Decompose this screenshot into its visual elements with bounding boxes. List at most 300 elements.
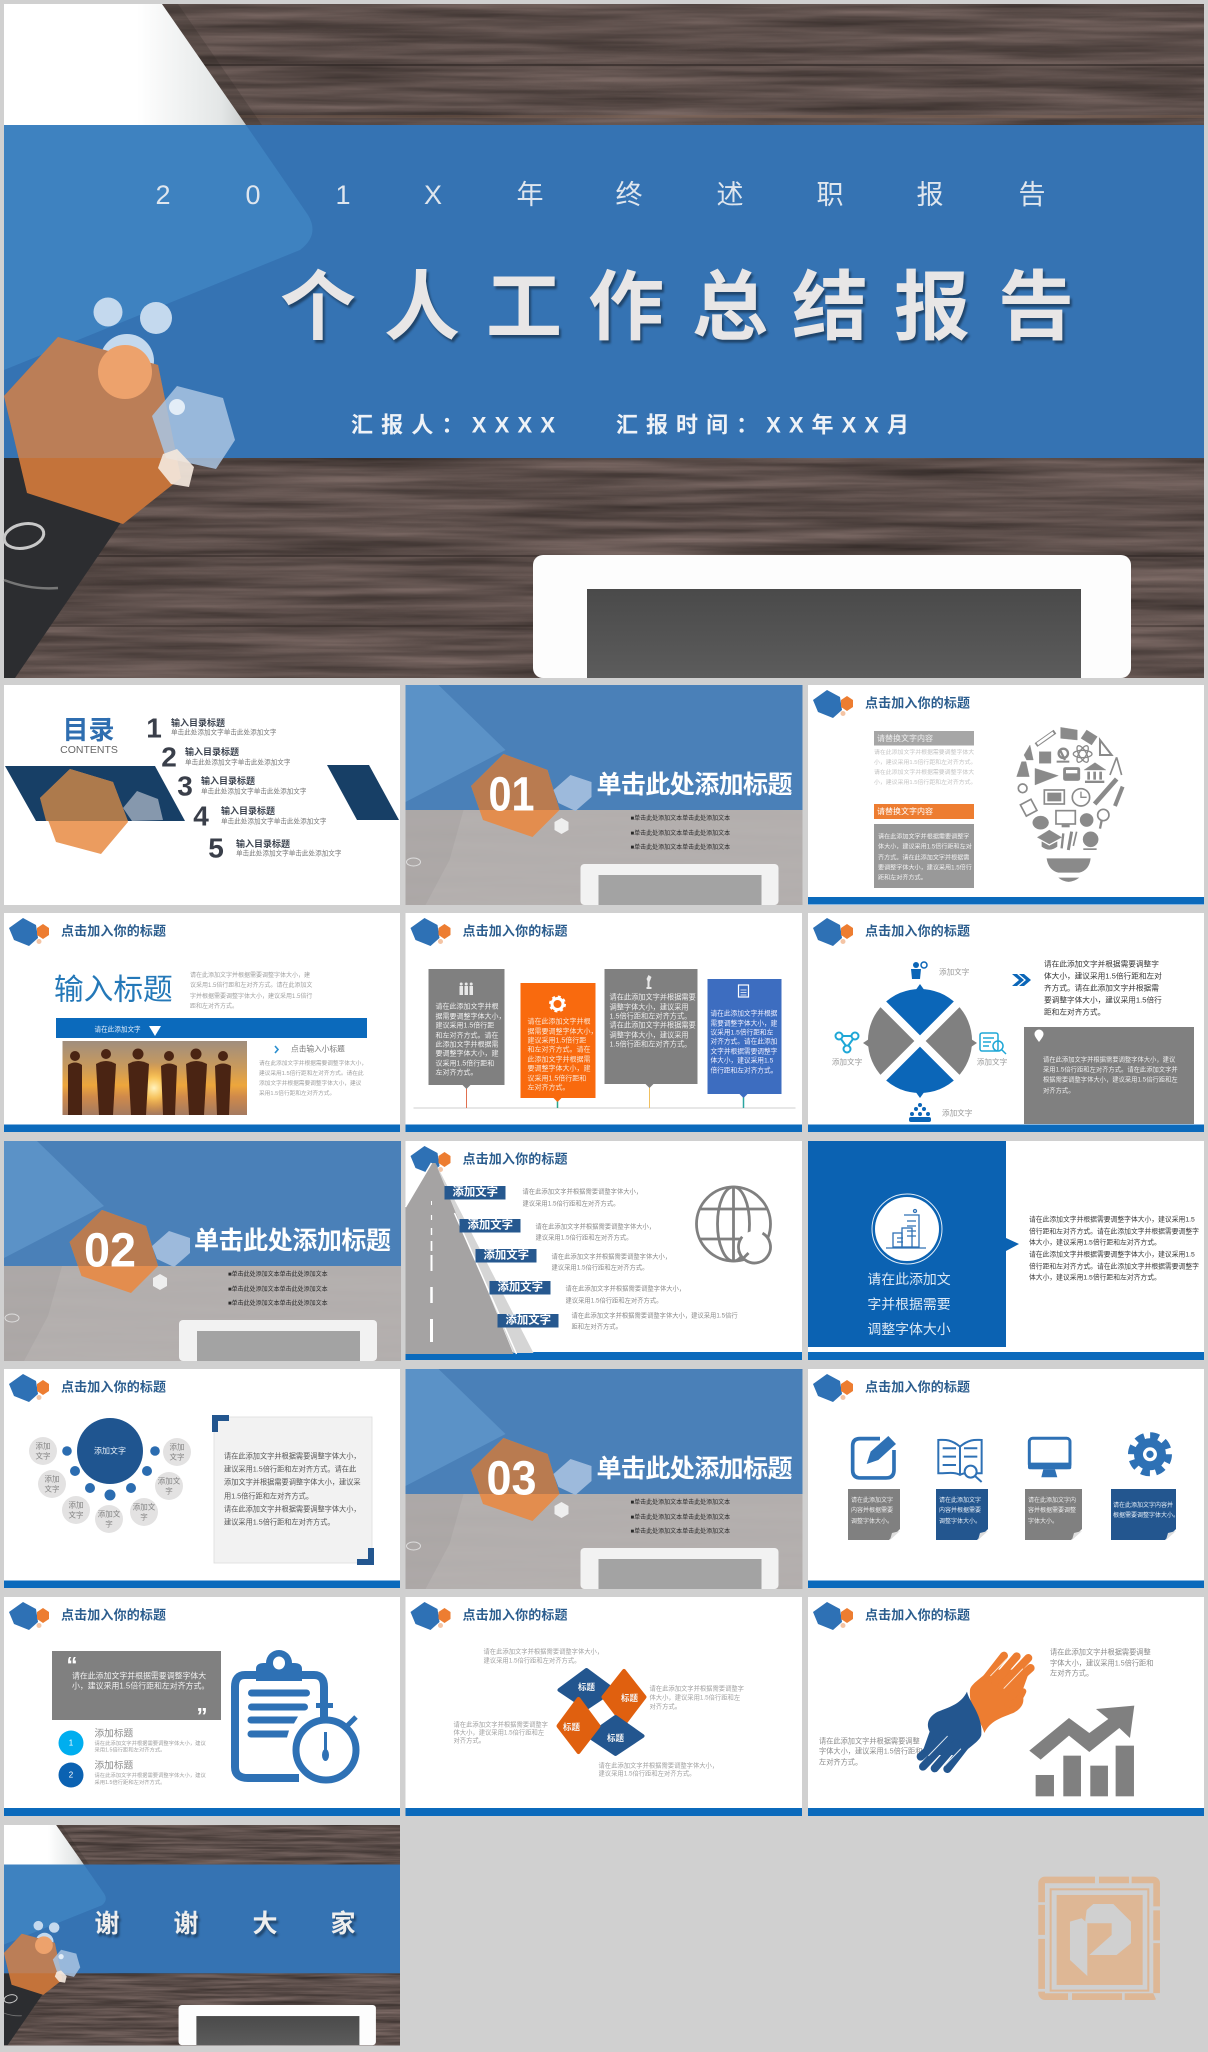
- outer circle labels: 添加文: [133, 1502, 156, 1512]
- contents list: 输入目录标题: [236, 838, 290, 849]
- item 2: [58, 1760, 206, 1788]
- cover title: 人: [384, 266, 460, 350]
- slide background: [808, 1141, 1204, 1360]
- contents list: 单击此处添加文字单击此处添加文字: [236, 848, 342, 858]
- slide background: [4, 685, 400, 905]
- header logo: [9, 918, 49, 946]
- thank you text: 家: [330, 1910, 356, 1938]
- section bullets: ■单击此处添加文本单击此处添加文本: [630, 1527, 730, 1535]
- road descriptions: 建议采用1.5倍行距和左对齐方式。: [536, 1232, 632, 1242]
- cover subtitle: 年: [516, 180, 544, 210]
- cover subtitle: 终: [616, 180, 642, 210]
- side paragraph: 采用1.5倍行距和左对齐方式。: [259, 1089, 335, 1097]
- section background: [4, 1141, 401, 1361]
- slide: cover: [2, 4, 1204, 678]
- slide title: 点击加入你的标题: [462, 924, 568, 938]
- card 4: 请在此添加文字并根据: [710, 1008, 778, 1018]
- section number: 03: [486, 1452, 536, 1506]
- left text: 体大小，建议采用1.5倍行距和左: [454, 1728, 544, 1736]
- orange hexagon: [40, 769, 128, 854]
- big heading: 输入标题: [54, 974, 173, 1006]
- left text: 左对齐方式。: [819, 1758, 862, 1766]
- slide title: 点击加入你的标题: [61, 1380, 166, 1394]
- grey heading bar: [874, 731, 974, 746]
- intro paragraph: 字并根据需要调整字体大小，建议采用1.5倍行: [190, 992, 312, 1000]
- card 3: 请在此添加文字并根据需要: [610, 1020, 696, 1030]
- cover title: 工: [486, 266, 562, 350]
- blue ribbon: 请在此添加文字: [94, 1024, 141, 1034]
- thank you text: 大: [252, 1910, 278, 1938]
- side paragraph: 请在此添加文字并根据需要调整字体大小，: [259, 1059, 367, 1067]
- slide: input title with photo: [4, 913, 400, 1132]
- icon: rising bar chart: [1029, 1706, 1134, 1796]
- paragraph: 倍行距和左对齐方式。请在此添加文字并根据需要调整字: [1029, 1262, 1199, 1270]
- four sector circle: [863, 984, 977, 1098]
- contents list: 5: [208, 832, 224, 864]
- outer circle labels: 字: [165, 1486, 173, 1496]
- section title: 单击此处添加标题: [596, 1455, 792, 1483]
- grey info box: [1024, 1027, 1194, 1124]
- card 2: 建议采用1.5倍行距: [528, 1036, 586, 1044]
- reporter and date: 汇报人：XXXX: [351, 412, 555, 438]
- card 1: 要调整字体大小，建: [436, 1048, 498, 1058]
- grey info box: 对齐方式。: [1043, 1086, 1074, 1094]
- card 3: [1025, 1489, 1082, 1540]
- outer circle labels: 添加: [68, 1500, 84, 1510]
- cover subtitle: X: [424, 180, 442, 210]
- icon: document search: [980, 1033, 1006, 1054]
- icon: people group: [909, 1103, 931, 1122]
- card 4: 议采用1.5倍行距和左: [710, 1028, 774, 1036]
- quote box: “: [66, 1652, 78, 1678]
- grey paragraph box: 齐方式。请在此添加文字并根据需: [878, 854, 969, 862]
- card 1: [848, 1489, 900, 1540]
- header logo: [813, 690, 853, 718]
- slide: circular diagram: [808, 913, 1204, 1132]
- right paragraph: 齐方式。请在此添加文字并根据需: [1044, 982, 1159, 992]
- outer circle labels: 文字: [36, 1450, 50, 1460]
- faded paragraph: 请在此添加文字并根据需要调整字体大: [874, 768, 974, 776]
- card 1: 此添加文字并根据需: [436, 1040, 498, 1048]
- footer bar: [808, 1124, 1204, 1132]
- icon: clipboard with stopwatch: [235, 1650, 356, 1780]
- footer bar: [4, 1580, 400, 1588]
- slide background: [406, 913, 802, 1132]
- slide title: 点击加入你的标题: [865, 696, 970, 710]
- slide title: 点击加入你的标题: [462, 1152, 568, 1166]
- road descriptions: 建议采用1.5倍行距和左对齐方式。: [566, 1296, 662, 1304]
- paragraph: 请在此添加文字并根据需要调整字体大小，建议采用1.5: [1029, 1250, 1195, 1258]
- watermark stamp: [1042, 1880, 1157, 1997]
- road labels: 添加文字: [498, 1280, 543, 1294]
- card 3: 1.5倍行距和左对齐方式。: [610, 1012, 691, 1020]
- header logo: [9, 1374, 49, 1402]
- slide: satellite circles: [4, 1369, 400, 1588]
- footer bar: [808, 1808, 1204, 1816]
- cover subtitle: 述: [716, 180, 744, 210]
- section bullets: ■单击此处添加文本单击此处添加文本: [630, 814, 730, 822]
- orange heading bar: [874, 804, 974, 819]
- card 4: 请在此添加文字内容并: [1113, 1501, 1173, 1509]
- left text: [454, 1720, 548, 1744]
- quote box: [52, 1651, 221, 1728]
- card 2: 要调整字体大小，建: [528, 1064, 590, 1072]
- text panel: [212, 1415, 374, 1565]
- side paragraph: 添加文字并根据需要调整字体大小，建议: [259, 1079, 362, 1087]
- grey paragraph box: [874, 824, 974, 888]
- diamond cluster: 标题: [621, 1693, 638, 1703]
- slide title: 点击加入你的标题: [865, 1380, 970, 1394]
- road descriptions: 请在此添加文字并根据需要调整字体大小，: [552, 1252, 671, 1260]
- cover title: 结: [792, 266, 868, 350]
- section bullets: [630, 814, 730, 851]
- card 2: 调整字体大小。: [939, 1517, 981, 1525]
- header logo: [813, 1374, 853, 1402]
- outer circle labels: 文字: [44, 1484, 60, 1494]
- cover title: [280, 266, 1074, 350]
- card 4: 文字并根据需要调整字: [710, 1046, 778, 1056]
- double chevron arrow: [1012, 974, 1031, 986]
- contents list: 单击此处添加文字单击此处添加文字: [201, 786, 307, 796]
- footer bar: [406, 1124, 802, 1132]
- section bullets: ■单击此处添加文本单击此处添加文本: [228, 1299, 328, 1307]
- slide background: [406, 1597, 802, 1816]
- grey info box: 请在此添加文字并根据需要调整字体大小，建议: [1043, 1054, 1176, 1064]
- icon: gear: [1131, 1436, 1169, 1473]
- footer bar: [4, 1124, 400, 1132]
- top right text: 字体大小，建议采用1.5倍行距和: [1050, 1658, 1153, 1668]
- blue panel: 请在此添加文: [867, 1271, 951, 1287]
- text panel: 请在此添加文字并根据需要调整字体大小，: [224, 1452, 361, 1460]
- cover subtitle: 0: [245, 180, 261, 210]
- outer circle labels: [36, 1440, 184, 1528]
- slide: contents: [4, 685, 400, 905]
- cover background with wood, banner and hexagons: [2, 4, 1204, 678]
- slide: hands and chart: [808, 1597, 1204, 1816]
- contents english label: CONTENTS: [60, 744, 118, 756]
- top text: 请在此添加文字并根据需要调整字体大小，: [484, 1646, 603, 1656]
- paragraph: 倍行距和左对齐方式。请在此添加文字并根据需要调整字: [1029, 1226, 1199, 1236]
- bottom text: 建议采用1.5倍行距和左对齐方式。: [598, 1768, 695, 1778]
- card 4: 对齐方式。请在此添加: [710, 1036, 778, 1046]
- top right text: 请在此添加文字并根据需要调整: [1050, 1648, 1151, 1656]
- intro paragraph: 议采用1.5倍行距和左对齐方式。请在此添加文: [190, 981, 312, 989]
- paragraph: 请在此添加文字并根据需要调整字体大小，建议采用1.5: [1029, 1214, 1195, 1224]
- road descriptions: 请在此添加文字并根据需要调整字体大小，: [536, 1222, 655, 1230]
- slide: blue panel with text: [808, 1141, 1204, 1360]
- card 2: 内容并根据需要: [939, 1506, 981, 1514]
- contents list: [146, 712, 342, 864]
- label top: 添加文字: [939, 966, 970, 976]
- card 2: 据需要调整字体大小，: [528, 1026, 598, 1036]
- item 2: 采用1.5倍行距和左对齐方式。: [94, 1778, 165, 1786]
- icon: edit: [853, 1436, 896, 1478]
- grey info box: 采用1.5倍行距和左对齐方式。请在此添加文字并: [1043, 1064, 1178, 1074]
- contents list: 1: [146, 712, 162, 744]
- icon: network: [836, 1032, 858, 1052]
- contents list: 输入目录标题: [221, 805, 275, 816]
- road descriptions: 请在此添加文字并根据需要调整字体大小，: [566, 1284, 685, 1292]
- road descriptions: 请在此添加文字并根据需要调整字体大小，: [522, 1186, 642, 1196]
- cover title: 作: [588, 266, 664, 350]
- blue panel: 调整字体大小: [867, 1321, 951, 1337]
- road labels: 添加文字: [484, 1248, 529, 1262]
- road labels: [444, 1184, 558, 1328]
- contents list: 单击此处添加文字单击此处添加文字: [171, 728, 277, 736]
- section bullets: ■单击此处添加文本单击此处添加文本: [630, 1513, 730, 1521]
- card 3: 请在此添加文字并根据需要: [610, 992, 696, 1002]
- header logo: [410, 918, 450, 946]
- slide title: 点击加入你的标题: [865, 924, 970, 938]
- contents list: 4: [193, 800, 209, 832]
- section bullets: ■单击此处添加文本单击此处添加文本: [228, 1285, 328, 1293]
- diamond cluster: 标题: [607, 1733, 624, 1743]
- text panel: 建议采用1.5倍行距和左对齐方式。: [224, 1518, 335, 1526]
- item 1: [58, 1728, 206, 1756]
- right paragraph: 要调整字体大小，建议采用1.5倍行: [1044, 994, 1162, 1004]
- thank you text: [94, 1910, 356, 1938]
- outer circle labels: 字: [140, 1512, 148, 1522]
- connecting dots: [62, 1446, 160, 1500]
- cover subtitle: 职: [816, 180, 844, 210]
- thank you text: 谢: [94, 1910, 120, 1938]
- icon: presenter: [911, 962, 927, 979]
- diamond cluster: 标题: [578, 1682, 595, 1692]
- grey heading bar: 请替换文字内容: [877, 733, 933, 743]
- diamond cluster: [558, 1670, 644, 1754]
- outer circle labels: 文字: [68, 1510, 84, 1520]
- slide: clipboard: [4, 1597, 400, 1816]
- contents list: 输入目录标题: [201, 775, 255, 786]
- card 4: 需要调整字体大小，建: [710, 1018, 778, 1028]
- section background: [406, 685, 802, 905]
- faded paragraph: [874, 748, 976, 786]
- right paragraph: 请在此添加文字并根据需要调整字: [1044, 958, 1159, 968]
- label bottom: 添加文字: [942, 1108, 973, 1118]
- section bullets: ■单击此处添加文本单击此处添加文本: [630, 843, 730, 851]
- footer bar: [406, 1352, 802, 1360]
- card 1: 调整字体大小。: [851, 1517, 893, 1525]
- grey info box: 根据需要调整字体大小，建议采用1.5倍行距和左: [1043, 1074, 1178, 1084]
- faded paragraph: 请在此添加文字并根据需要调整字体大: [874, 748, 974, 756]
- header logo: [813, 918, 853, 946]
- outer circle labels: 添加: [36, 1440, 50, 1450]
- sub heading with chevron: [275, 1044, 345, 1054]
- cover subtitle: 2: [155, 180, 171, 210]
- slide: four cards timeline: [406, 913, 802, 1132]
- right paragraph: 体大小，建议采用1.5倍行距和左对: [1044, 970, 1162, 980]
- slide background: [4, 913, 400, 1132]
- card 1: 请在此添加文字: [851, 1496, 893, 1504]
- left text: 请在此添加文字并根据需要调整: [819, 1736, 920, 1746]
- card 1: 据需要调整字体大小，: [436, 1012, 506, 1020]
- mini cover background: [3, 1825, 400, 2045]
- header logo: [9, 1602, 49, 1630]
- contents list: 2: [161, 742, 177, 772]
- header logo: [410, 1602, 450, 1630]
- card 4: [1111, 1489, 1179, 1540]
- slide background: [808, 913, 1204, 1132]
- blue panel: [808, 1141, 1019, 1347]
- header logo: [813, 1602, 853, 1630]
- item 1: 请在此添加文字并根据需要调整字体大小，建议: [94, 1739, 206, 1747]
- right paragraph: 距和左对齐方式。: [1044, 1006, 1105, 1016]
- road descriptions: 建议采用1.5倍行距和左对齐方式。: [552, 1262, 648, 1272]
- paragraph: [1029, 1214, 1199, 1282]
- outer circles: [29, 1437, 191, 1533]
- section bullets: ■单击此处添加文本单击此处添加文本: [228, 1270, 328, 1278]
- slide: interlocking diamonds: [406, 1597, 802, 1816]
- card 4: 倍行距和左对齐方式。: [710, 1066, 777, 1074]
- slide title: 点击加入你的标题: [865, 1608, 970, 1622]
- item 1: 1: [69, 1738, 74, 1748]
- slide background: [808, 1597, 1204, 1816]
- text panel: 请在此添加文字并根据需要调整字体大小，: [224, 1504, 361, 1514]
- grey paragraph box: 距和左对齐方式。: [878, 874, 927, 882]
- sub heading with chevron: 点击输入小标题: [291, 1044, 345, 1054]
- text panel: 用1.5倍行距和左对齐方式。: [224, 1492, 313, 1500]
- quote box: ”: [196, 1704, 208, 1728]
- top right text: [1050, 1648, 1153, 1678]
- footer bar: [808, 897, 1204, 904]
- road descriptions: 距和左对齐方式。: [572, 1322, 622, 1330]
- slide: section 03: [406, 1369, 802, 1589]
- card 2: [520, 983, 598, 1102]
- contents list: 输入目录标题: [185, 746, 239, 757]
- slide background: [4, 1597, 400, 1816]
- item 2: 添加标题: [94, 1760, 134, 1772]
- slide background: [808, 1369, 1204, 1588]
- left text: 请在此添加文字并根据需要调整字: [454, 1720, 548, 1728]
- outer circle labels: 添加文: [98, 1508, 121, 1518]
- card 1: 建议采用1.5倍行距: [436, 1020, 494, 1030]
- paragraph: 体大小，建议采用1.5倍行距和左对齐方式。: [1029, 1238, 1161, 1246]
- bottom text: [598, 1760, 718, 1778]
- top text: 建议采用1.5倍行距和左对齐方式。: [484, 1656, 580, 1664]
- left text: [819, 1736, 922, 1766]
- slide: lightbulb text: [808, 685, 1204, 905]
- faded paragraph: 小，建议采用1.5倍行距和左对齐方式。: [874, 778, 976, 786]
- central circle: 添加文字: [94, 1446, 126, 1456]
- reporter and date: [351, 412, 909, 438]
- card 2: 请在此添加文字并根: [528, 1016, 590, 1026]
- right text: 请在此添加文字并根据需要调整字: [650, 1684, 744, 1692]
- faded paragraph: 小，建议采用1.5倍行距和左对齐方式。: [874, 758, 976, 766]
- cover title: 报: [894, 266, 970, 350]
- slide title: 点击加入你的标题: [61, 924, 166, 938]
- quote box: 请在此添加文字并根据需要调整字体大: [72, 1670, 206, 1680]
- left text: 对齐方式。: [454, 1736, 485, 1744]
- central circle: [77, 1418, 143, 1484]
- card 2: 请在此添加文字: [939, 1496, 981, 1504]
- card 1: 左对齐方式。: [436, 1068, 478, 1076]
- cover subtitle: 报: [916, 180, 944, 210]
- footer bar: [4, 1808, 400, 1816]
- section title: 单击此处添加标题: [194, 1227, 391, 1255]
- quote box: 小，建议采用1.5倍行距和左对齐方式。: [72, 1680, 209, 1690]
- card 1: 和左对齐方式。请在: [436, 1030, 498, 1040]
- section bullets: ■单击此处添加文本单击此处添加文本: [630, 1498, 730, 1506]
- left text: 字体大小，建议采用1.5倍行距和: [819, 1746, 922, 1756]
- outer circle labels: 添加文: [158, 1476, 181, 1486]
- paragraph: 体大小，建议采用1.5倍行距和左对齐方式。: [1029, 1272, 1161, 1282]
- text panel: 添加文字并根据需要调整字体大小，建议采: [224, 1478, 361, 1486]
- cover subtitle: 告: [1018, 180, 1046, 210]
- card 1: 请在此添加文字并根: [436, 1002, 498, 1010]
- item 1: 采用1.5倍行距和左对齐方式。: [94, 1746, 165, 1754]
- section background: [406, 1369, 802, 1589]
- cover title: 总: [692, 266, 768, 350]
- photo: team at sunset: [62, 1041, 247, 1115]
- slide title: 点击加入你的标题: [61, 1608, 166, 1622]
- card 1: 议采用1.5倍行距和: [436, 1058, 494, 1068]
- cover subtitle: [155, 180, 1046, 210]
- cover title: 告: [998, 266, 1074, 350]
- left dark band: [5, 766, 185, 821]
- slide: thanks: [3, 1825, 400, 2045]
- grey paragraph box: 体大小，建议采用1.5倍行距和左对: [878, 842, 972, 850]
- section title: 单击此处添加标题: [596, 771, 792, 799]
- item 1: 添加标题: [94, 1728, 134, 1740]
- footer bar: [406, 1808, 802, 1816]
- slide title: 点击加入你的标题: [462, 1608, 568, 1622]
- contents heading: 目录: [62, 715, 115, 745]
- text panel: 建议采用1.5倍行距和左对齐方式。请在此: [224, 1464, 356, 1474]
- right dark band: [327, 765, 399, 820]
- footer bar: [808, 1352, 1204, 1360]
- road descriptions: [522, 1186, 738, 1330]
- label right: 添加文字: [977, 1056, 1008, 1066]
- card 2: 此添加文字并根据需: [528, 1054, 590, 1064]
- outer circle labels: 文字: [170, 1452, 184, 1462]
- section bullets: [630, 1498, 730, 1535]
- road labels: 添加文字: [452, 1184, 498, 1198]
- right text: 体大小，建议采用1.5倍行距和左: [650, 1692, 740, 1702]
- card 3: [604, 969, 698, 1088]
- road labels: 添加文字: [468, 1218, 513, 1232]
- section bullets: [228, 1270, 328, 1307]
- thank you text: 谢: [173, 1910, 199, 1938]
- card 2: [936, 1489, 988, 1540]
- orange heading bar: 请替换文字内容: [877, 806, 933, 816]
- grey paragraph box: 请在此添加文字并根据需要调整字: [878, 832, 969, 840]
- right text: [650, 1684, 744, 1710]
- side paragraph: 建议采用1.5倍行距和左对齐方式。请在此: [259, 1069, 364, 1077]
- section number: 01: [488, 768, 534, 822]
- grey paragraph box: 要调整字体大小，建议采用1.5倍行: [878, 864, 972, 872]
- road descriptions: 请在此添加文字并根据需要调整字体大小，建议采用1.5倍行: [572, 1310, 738, 1320]
- icon: monitor: [1028, 1438, 1071, 1477]
- icon: lightbulb of school objects: [1017, 727, 1123, 882]
- card 3: 调整字体大小，建议采用: [610, 1002, 689, 1012]
- card 4: 体大小，建议采用1.5: [710, 1056, 774, 1064]
- card 3: 请在此添加文字内: [1028, 1496, 1076, 1504]
- slide background: [4, 1369, 400, 1588]
- card 2: 左对齐方式。: [528, 1082, 570, 1092]
- outer circle labels: 添加: [170, 1442, 184, 1452]
- grey blue hexagon: [123, 791, 163, 821]
- road illustration: [406, 1163, 534, 1354]
- outer circle labels: 字: [105, 1518, 113, 1528]
- side paragraph: [259, 1059, 367, 1097]
- card 3: 1.5倍行距和左对齐方式。: [610, 1040, 691, 1048]
- card 3: 容并根据需要调整: [1028, 1506, 1076, 1514]
- intro paragraph: 距和左对齐方式。: [190, 1002, 238, 1010]
- card 2: 议采用1.5倍行距和: [528, 1074, 586, 1082]
- card 4: 根据需要调整字体大小。: [1113, 1511, 1179, 1519]
- bottom text: 请在此添加文字并根据需要调整字体大小，: [598, 1760, 718, 1770]
- right text: 对齐方式。: [650, 1702, 681, 1710]
